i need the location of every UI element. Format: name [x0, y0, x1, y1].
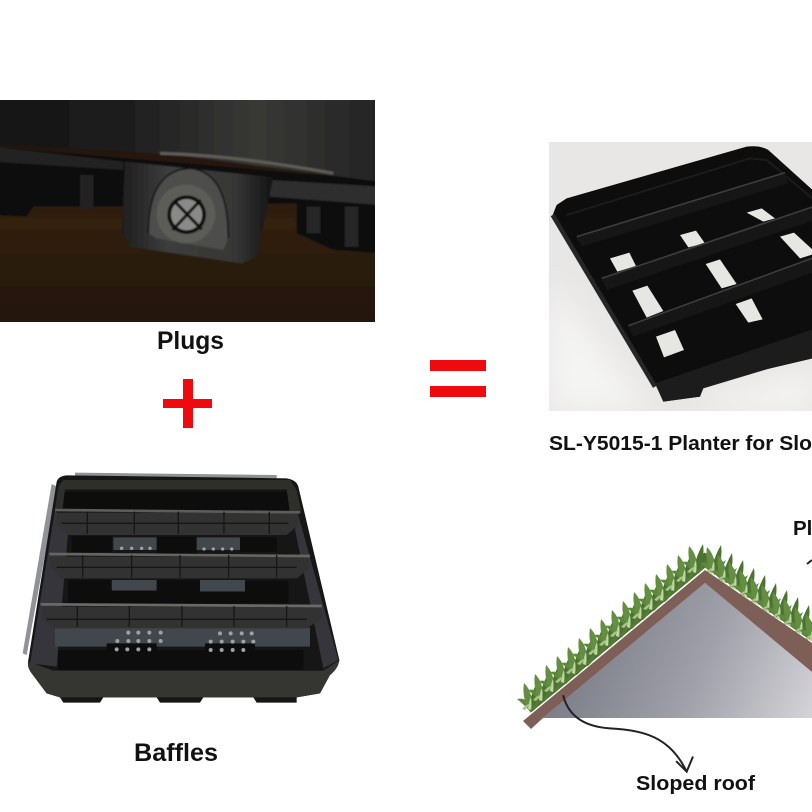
diagram: sloped roof — [517, 544, 812, 729]
arrow: sloped roof pointer — [563, 696, 693, 772]
roof interior — [543, 583, 812, 718]
plants: right slope — [700, 545, 812, 642]
label: plants: Pl — [793, 517, 812, 540]
planter body — [553, 146, 812, 402]
black pots row 2 — [68, 580, 288, 603]
roof slab — [523, 570, 812, 729]
plants: left slope — [517, 544, 708, 711]
white patches — [610, 208, 812, 357]
label: planter: SL-Y5015-1 Planter for Slo — [549, 432, 812, 455]
icon: red equals — [430, 360, 486, 397]
baffle 3 — [42, 607, 322, 628]
black pots row 1 — [72, 536, 277, 553]
tray underside band — [0, 147, 380, 253]
tray wall — [0, 97, 380, 182]
arrow: plants pointer — [807, 560, 812, 564]
tray body — [28, 475, 339, 703]
tray back compartment — [63, 492, 289, 510]
panel: plugs photo — [0, 97, 380, 327]
tray front wall — [28, 660, 339, 697]
label: sloped roof: Sloped roof — [636, 772, 755, 795]
panel: planter photo — [549, 142, 812, 411]
icon: red plus — [163, 379, 212, 428]
planter baffles — [577, 173, 788, 247]
baffle 1 — [57, 513, 298, 535]
label: baffles: Baffles — [134, 739, 218, 767]
panel: baffles photo — [23, 473, 339, 703]
floor blue-gray strips — [55, 537, 310, 647]
icon: plug housing — [122, 162, 273, 263]
plant base band — [527, 560, 812, 708]
black pots row 3 — [58, 643, 303, 670]
label: plugs: Plugs — [157, 327, 224, 355]
floor — [0, 144, 375, 322]
baffle 2 — [50, 557, 310, 578]
planter front wall — [655, 327, 812, 402]
tray flanges — [23, 473, 277, 655]
inner side walls — [30, 510, 338, 668]
perforated dots — [115, 547, 255, 652]
